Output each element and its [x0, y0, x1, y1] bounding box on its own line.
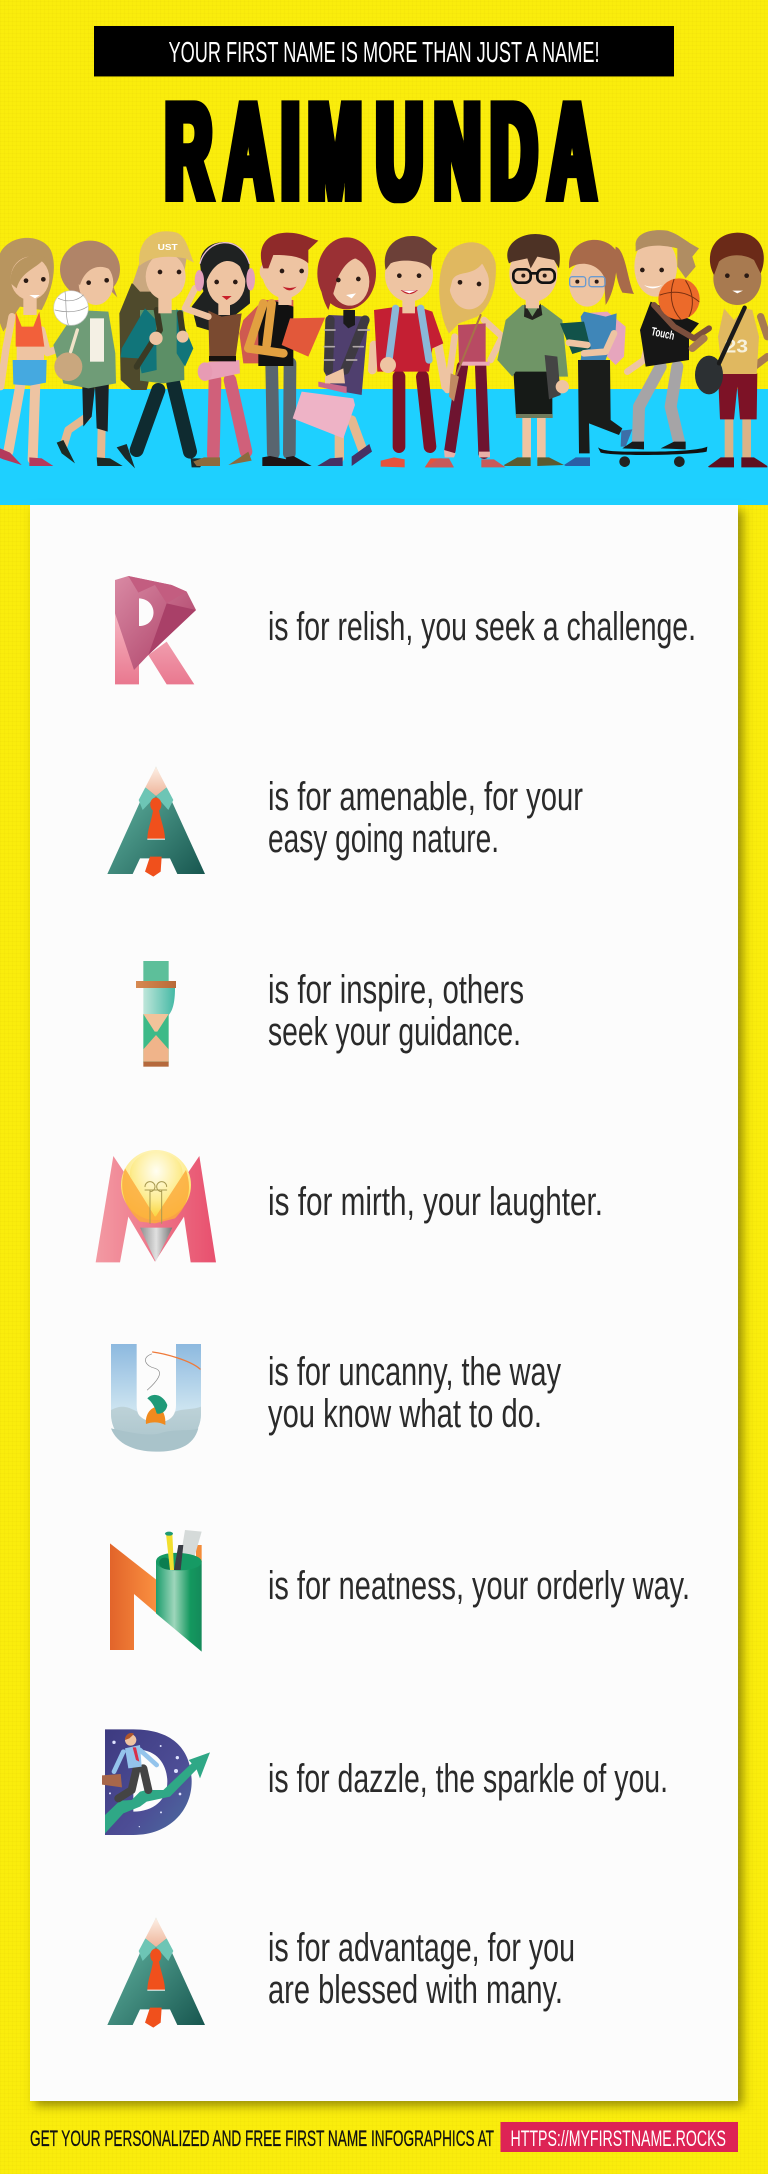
person: girl with pink bag [293, 237, 376, 466]
illustration: group of students, right half [372, 230, 767, 467]
icon: second letter A with tie [107, 1918, 205, 2028]
blue floor band [0, 389, 768, 505]
icon: letter M lightbulb [96, 1150, 216, 1262]
text: A line: easy going nature. [268, 817, 499, 861]
person: boy in red shirt [372, 236, 453, 467]
person: boy with cap and backpack: UST [158, 242, 178, 252]
person: skater with basketball [598, 230, 709, 467]
text: U line: you know what to do. [268, 1392, 542, 1436]
person: girl with volleyball [53, 241, 123, 466]
cover band over card shadow top [0, 500, 768, 505]
text: M line: is for mirth, your laughter. [268, 1180, 603, 1224]
person: girl with headphones [185, 242, 255, 466]
banner: tagline bar [94, 26, 674, 77]
icon: letter D businessman [102, 1729, 210, 1835]
illustration: group of students, left half [0, 231, 376, 468]
text: U line: is for uncanny, the way [268, 1350, 561, 1394]
person: skater with basketball: Touch [650, 324, 676, 343]
text: I line: seek your guidance. [268, 1010, 521, 1054]
icon: letter N pencil cup [110, 1530, 202, 1652]
person: blond girl [426, 242, 506, 467]
person: girl in orange top [0, 238, 77, 466]
person: boy in tank top with bag [692, 233, 767, 467]
person: boy with glasses [497, 234, 569, 466]
icon: letter A with tie [107, 767, 205, 877]
person: girl with tablet and ponytail [560, 240, 634, 466]
text: second A line: is for advantage, for you [268, 1926, 575, 1970]
person: boy with cap and backpack [117, 231, 207, 468]
person: boy in tank top with bag: 23 [725, 336, 748, 357]
icon: letter U fishing [111, 1344, 201, 1452]
icon: letter R with gem [115, 576, 196, 684]
title: name: RAIMUNDA [165, 75, 595, 227]
text: I line: is for inspire, others [268, 968, 524, 1012]
footer: call to action: GET YOUR PERSONALIZED AND FREE FIRST NAME INFOGRAPHICS AT [30, 2126, 494, 2151]
panel: white content card [30, 505, 738, 2101]
text: A line: is for amenable, for your [268, 775, 583, 819]
text: second A line: are blessed with many. [268, 1968, 563, 2012]
person: boy reading a book [239, 233, 325, 466]
icon: letter I hourglass [136, 961, 176, 1067]
